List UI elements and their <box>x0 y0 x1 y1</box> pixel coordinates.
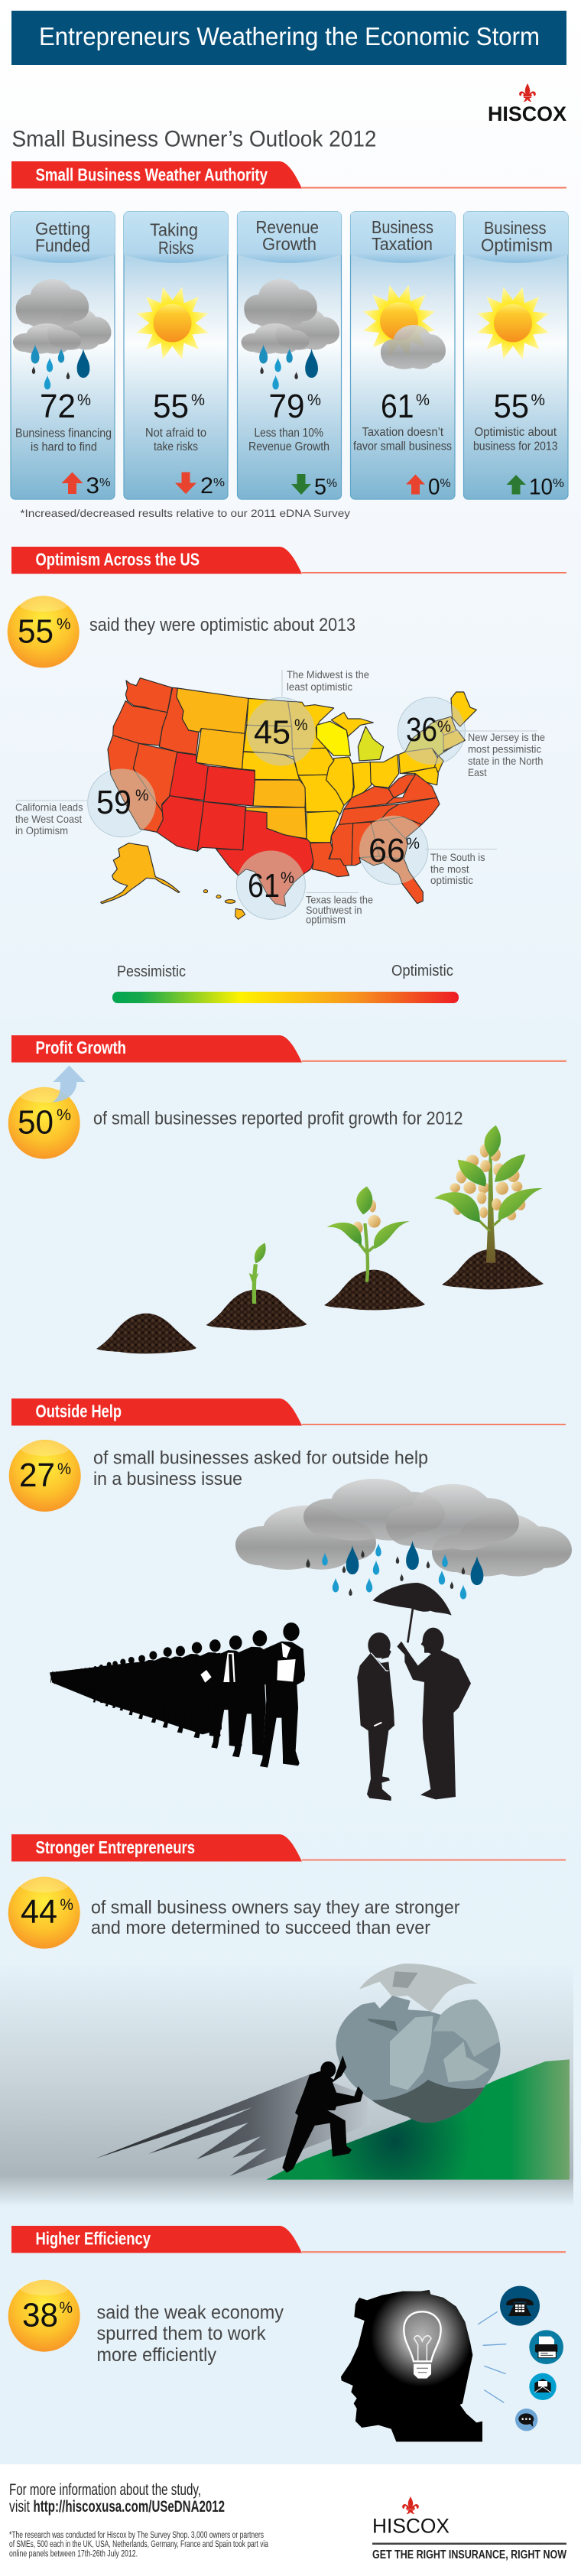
callout: midwest 45 percent: The Midwest is the <box>287 668 369 681</box>
change: up 0 percent <box>406 474 451 500</box>
logo: Hiscox top: HISCOX <box>488 102 566 125</box>
card title: Getting <box>35 219 90 239</box>
card: business taxation <box>350 212 455 500</box>
callout: south 66 percent: the most <box>430 862 469 875</box>
man on right <box>397 1628 471 1799</box>
stat bubble 44 percent: % <box>60 1896 73 1914</box>
states <box>101 678 476 906</box>
callout: north east 36 percent: % <box>437 718 451 736</box>
callout: california 59 percent: the West Coast <box>15 813 82 825</box>
stat bubble 27 percent: % <box>57 1460 71 1478</box>
stat 79 percent: 79 <box>269 388 304 425</box>
callout: south 66 percent: The South is <box>430 851 485 863</box>
change: down 5 percent: % <box>326 477 337 490</box>
stat bubble 44 percent <box>8 1877 80 1949</box>
description: Not afraid to <box>145 427 206 440</box>
legend: pessimistic to optimistic <box>112 963 459 1003</box>
section heading: stronger entrepreneurs: Stronger Entrepreneurs <box>35 1837 195 1857</box>
description: business for 2013 <box>473 440 558 453</box>
callout: south 66 percent: % <box>406 835 420 853</box>
man pushing boulder <box>282 2055 363 2173</box>
methodology note <box>9 2531 268 2558</box>
more information text <box>9 2481 225 2516</box>
icon: storm clouds and rain <box>235 1479 572 1600</box>
statement: of small business owners say they are stronger <box>91 1898 460 1918</box>
subtitle: Small Business Owner’s Outlook 2012 <box>12 127 376 151</box>
section heading: weather authority <box>11 161 566 188</box>
change: up 3 percent: 3 <box>86 473 99 499</box>
panel: footer <box>9 2481 567 2561</box>
stat bubble 55 percent: % <box>57 616 70 633</box>
icon: sun <box>477 287 549 359</box>
seedling on mound <box>206 1243 307 1330</box>
legend: pessimistic to optimistic: Optimistic <box>391 963 453 979</box>
icon: mail envelope <box>529 2373 557 2400</box>
head silhouette with lightbulb <box>341 2285 482 2441</box>
card title <box>255 217 319 254</box>
description <box>353 426 452 453</box>
scene backdrop <box>0 1965 573 2207</box>
section heading: profit growth <box>11 1035 566 1063</box>
change: down 2 percent: % <box>213 476 225 489</box>
section heading: outside help: Outside Help <box>35 1401 122 1421</box>
stat bubble 38 percent <box>8 2280 80 2352</box>
stat 55 percent: % <box>191 391 205 409</box>
connector lines <box>478 2311 506 2402</box>
change: up 0 percent: % <box>440 477 451 490</box>
callout: north east 36 percent: state in the North <box>468 755 543 767</box>
icon: sun <box>136 287 209 359</box>
translucent circle tint <box>110 700 464 906</box>
icon: storm clouds and rain <box>13 279 112 390</box>
callout: north east 36 percent: East <box>468 766 487 778</box>
panel: profit growth <box>8 1035 566 1353</box>
stat 79 percent: % <box>307 391 321 409</box>
description <box>145 427 206 453</box>
card: revenue growth <box>237 212 341 500</box>
change: down 2 percent <box>175 473 225 499</box>
change: up 0 percent: 0 <box>428 474 440 500</box>
stat 55 percent: 55 <box>494 388 529 425</box>
panel: optimism across the US <box>8 547 566 1003</box>
callout: texas 61 percent: Southwest in <box>306 904 362 916</box>
stat 55 percent: % <box>531 391 545 409</box>
card title <box>35 219 90 255</box>
description <box>248 427 329 453</box>
callout: texas 61 percent: 61 <box>248 867 280 905</box>
card title: Funded <box>35 236 90 255</box>
statement: and more determined to succeed than ever <box>91 1918 430 1938</box>
change: up 3 percent <box>61 473 110 499</box>
change: up 10 percent <box>506 474 564 500</box>
callout: california 59 percent: California leads <box>15 801 83 814</box>
statement: more efficiently <box>96 2344 216 2366</box>
stat bubble 27 percent: 27 <box>19 1457 55 1494</box>
jagged motion shadow <box>96 2074 371 2176</box>
green hill <box>266 2059 570 2180</box>
callout: texas 61 percent: Texas leads the <box>306 893 373 905</box>
description <box>473 426 558 453</box>
statement: said they were optimistic about 2013 <box>89 615 355 635</box>
panel: outside help <box>9 1398 572 1801</box>
card: getting funded <box>11 212 115 499</box>
description <box>15 427 112 454</box>
card title <box>150 220 198 258</box>
icon: chat bubble <box>515 2409 537 2431</box>
statement <box>96 2302 284 2366</box>
callout: california 59 percent: in Optimism <box>15 824 68 836</box>
stat bubble 50 percent: 50 <box>18 1104 54 1142</box>
panel: small business weather authority <box>11 161 568 519</box>
change: up 10 percent: % <box>553 477 564 490</box>
callout: texas 61 percent: % <box>281 869 294 887</box>
card title: Taking <box>150 220 198 240</box>
stat 61 percent: 61 <box>381 388 414 425</box>
statement <box>91 1898 460 1938</box>
card title: Optimism <box>481 236 553 255</box>
stat bubble 38 percent: % <box>60 2299 73 2317</box>
statement: said the weak economy <box>96 2302 284 2324</box>
callout circles behind map <box>88 697 465 919</box>
young plant on mound <box>324 1187 425 1310</box>
panel: higher efficiency <box>8 2226 566 2441</box>
callout: texas 61 percent: optimism <box>306 913 346 925</box>
card title: Business <box>372 217 433 237</box>
stat bubble 44 percent: 44 <box>21 1893 57 1931</box>
description: Revenue Growth <box>248 440 329 453</box>
legend: pessimistic to optimistic: Pessimistic <box>117 963 186 980</box>
card title: Business <box>484 218 546 238</box>
icon: telephone <box>500 2286 540 2326</box>
card title: Growth <box>262 234 316 254</box>
footer background <box>0 2464 581 2576</box>
description: Taxation doesn’t <box>362 426 444 439</box>
change: up 3 percent: % <box>99 476 110 489</box>
stat bubble 55 percent: 55 <box>18 613 54 650</box>
description: Bunsiness financing <box>15 427 112 440</box>
panel: stronger entrepreneurs <box>0 1834 573 2207</box>
methodology note: online panels between 17th-26th July 2012. <box>9 2549 138 2558</box>
section heading: higher efficiency: Higher Efficiency <box>35 2229 151 2249</box>
stat bubble 50 percent: % <box>57 1106 71 1124</box>
title banner <box>11 11 566 65</box>
card: business optimism <box>463 212 568 500</box>
icon: upward arrow <box>52 1066 86 1103</box>
title banner: Entrepreneurs Weathering the Economic Storm <box>39 22 540 50</box>
section heading: weather authority: Small Business Weather Authority <box>35 165 268 185</box>
stat bubble 27 percent <box>9 1440 81 1512</box>
stat 55 percent: 55 <box>153 388 189 425</box>
methodology note: *The research was conducted for Hiscox by The Survey Shop. 3,000 owners or partners <box>9 2531 264 2540</box>
stat 72 percent: 72 <box>40 388 76 425</box>
stat bubble 50 percent <box>8 1087 80 1159</box>
logo: Hiscox footer: HISCOX <box>372 2515 450 2538</box>
card title: Taxation <box>372 234 433 254</box>
description: is hard to find <box>31 440 97 454</box>
boulder <box>336 1964 501 2123</box>
section heading: optimism <box>11 547 566 573</box>
description: Less than 10% <box>254 427 323 440</box>
callout: california 59 percent: % <box>135 787 148 804</box>
callout: north east 36 percent: most pessimistic <box>468 743 541 755</box>
description: favor small business <box>353 440 452 453</box>
change: up 10 percent: 10 <box>529 474 553 500</box>
callout: midwest 45 percent: % <box>294 716 307 734</box>
icon: printer <box>529 2330 563 2364</box>
section heading: stronger entrepreneurs <box>11 1834 566 1861</box>
callout: south 66 percent: 66 <box>368 832 405 869</box>
stat bubble 55 percent <box>8 596 80 668</box>
more information text: For more information about the study, <box>9 2481 201 2499</box>
callout: north east 36 percent: New Jersey is the <box>468 731 545 743</box>
icon: sun behind cloud <box>363 285 446 369</box>
queue of business people <box>50 1623 305 1768</box>
methodology note: of SMEs, 500 each in the UK, USA, Netherlands, Germany, France and Spain took part via <box>9 2540 268 2549</box>
change: down 5 percent: 5 <box>314 474 326 500</box>
statement: spurred them to work <box>96 2323 266 2344</box>
map of US by optimism <box>88 678 476 919</box>
soil mound <box>96 1314 196 1353</box>
logo: Hiscox footer <box>372 2496 450 2538</box>
callout: south 66 percent <box>368 832 497 886</box>
stat 61 percent: % <box>416 391 430 409</box>
grown plant with coins on mound <box>434 1126 544 1289</box>
lightbulb <box>404 2311 441 2379</box>
description: take risks <box>154 440 198 453</box>
callout: north east 36 percent: 36 <box>406 711 437 749</box>
stat bubble 38 percent: 38 <box>22 2297 58 2334</box>
icon: storm clouds and rain <box>242 279 339 390</box>
callout: midwest 45 percent: 45 <box>254 714 290 752</box>
logo: Hiscox top <box>488 83 566 125</box>
statement: in a business issue <box>93 1469 242 1489</box>
change: down 5 percent <box>291 474 337 500</box>
card: taking risks <box>124 212 228 499</box>
card title <box>481 218 553 255</box>
section heading: outside help <box>11 1398 566 1425</box>
description: Optimistic about <box>474 426 557 439</box>
two men under umbrella <box>357 1583 471 1801</box>
statement: of small businesses reported profit growth for 2012 <box>93 1109 463 1129</box>
more information text: visit <box>9 2498 30 2516</box>
statement <box>93 1448 428 1489</box>
callout: south 66 percent: optimistic <box>430 874 473 886</box>
callout: midwest 45 percent <box>254 668 369 752</box>
callout: california 59 percent <box>15 784 148 836</box>
statement: of small businesses asked for outside help <box>93 1448 428 1469</box>
callout: california 59 percent: 59 <box>96 784 131 821</box>
callout: north east 36 percent <box>406 711 545 778</box>
card title <box>372 217 433 254</box>
card title: Revenue <box>255 217 319 237</box>
card title: Risks <box>158 238 194 258</box>
section heading: profit growth: Profit Growth <box>35 1038 126 1057</box>
callout: midwest 45 percent: least optimistic <box>287 681 352 693</box>
footnote: *Increased/decreased results relative to our 2011 eDNA Survey <box>20 507 350 519</box>
umbrella <box>373 1583 452 1642</box>
callout: texas 61 percent <box>248 867 373 925</box>
change: down 2 percent: 2 <box>200 473 213 499</box>
man on left <box>357 1632 394 1801</box>
Hawaii islands <box>203 890 245 919</box>
white paper and shirts <box>200 1642 296 1683</box>
section heading: optimism: Optimism Across the US <box>35 549 200 569</box>
section heading: higher efficiency <box>11 2226 566 2253</box>
more information text: http://hiscoxusa.com/USeDNA2012 <box>34 2498 225 2516</box>
stat 72 percent: % <box>77 391 91 409</box>
